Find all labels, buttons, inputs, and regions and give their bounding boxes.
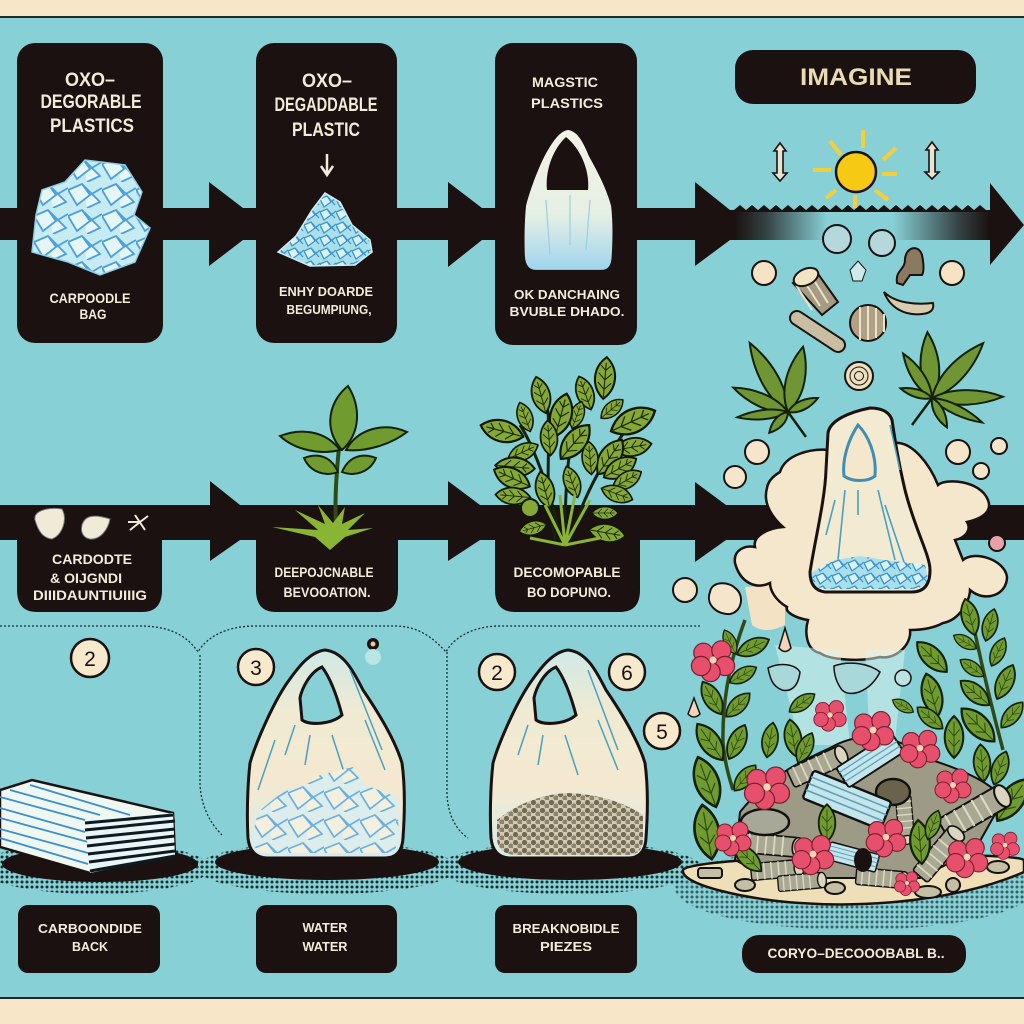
number badges (71, 639, 680, 749)
pile leaves (819, 804, 835, 842)
label: carboondide back (18, 905, 160, 973)
heading: OXO– (65, 70, 115, 91)
log (791, 264, 838, 315)
panel: oxo-degorable plastics (17, 43, 163, 343)
caption: OK DANCHAING (514, 288, 620, 302)
badge 5 (644, 713, 680, 749)
heading: PLASTIC (292, 120, 360, 141)
caption: BEGUMPIUNG, (286, 302, 372, 317)
panel: magstic plastics (495, 43, 637, 345)
small icon near bag (365, 638, 381, 665)
bubbles (673, 438, 1007, 614)
label: bottom pill: CORYO–DECOOOBABL B.. (768, 945, 944, 961)
arrow row 2 (0, 481, 1024, 562)
caption: CARPOODLE (50, 290, 130, 306)
title pill (735, 50, 976, 104)
heading: PLASTICS (531, 95, 603, 111)
debris mass (735, 737, 1003, 878)
ball (850, 305, 886, 341)
icon: stacked flat bags (0, 780, 175, 873)
badge 2 second (479, 654, 515, 690)
caption: BAG (80, 306, 107, 322)
badge 2 second: 2 (491, 662, 503, 685)
heading: DEGORABLE (40, 92, 142, 113)
caption: DIIIDAUNTIUIIIG (33, 588, 147, 603)
icon: bush (478, 356, 660, 545)
icon: seedling (272, 386, 407, 550)
spiral (845, 362, 873, 390)
icon: double arrows (773, 142, 939, 181)
crescent (884, 292, 933, 314)
badge 3: 3 (250, 657, 262, 680)
orbs (752, 225, 964, 285)
heading: MAGSTIC (532, 74, 598, 90)
label: breaknobidle pieces: PIEZES (540, 939, 592, 954)
heading (274, 71, 378, 141)
flowers (691, 641, 735, 682)
icon: granule pile (278, 193, 372, 266)
panel: cardodte caption (17, 508, 162, 612)
caption (279, 284, 373, 317)
stones (698, 861, 1009, 898)
cloud (735, 443, 1007, 660)
panel: decomopable caption: DECOMOPABLE (514, 565, 620, 580)
heading: DEGADDABLE (274, 95, 378, 116)
label: breaknobidle pieces (495, 905, 637, 973)
label: carboondide back: CARBOONDIDE (38, 921, 142, 936)
icons: fragments (35, 508, 148, 539)
label: water (256, 905, 397, 973)
badge 5: 5 (656, 721, 668, 744)
arrow: down (321, 154, 333, 175)
label: water: WATER (302, 939, 348, 954)
drips (688, 628, 911, 717)
halftone shadow (675, 846, 1024, 930)
badge 6 (609, 654, 645, 690)
rolls (786, 744, 851, 788)
heading: PLASTICS (50, 116, 134, 137)
icon: maple leaf left (731, 339, 820, 437)
panel: decomopable caption: BO DOPUNO. (527, 585, 611, 600)
caption: ENHY DOARDE (279, 284, 373, 299)
label: water: WATER (302, 920, 348, 935)
icon: plastic bag (525, 130, 612, 270)
panel: depojcnable caption: BEVOOATION. (284, 585, 370, 600)
stick (797, 318, 838, 345)
heading (40, 70, 142, 137)
dotted connector lines (0, 626, 700, 838)
panel: oxo-degadable plastic (256, 43, 397, 343)
horn (897, 248, 924, 285)
bottom cream border (0, 997, 1024, 1024)
decomposing pile (675, 597, 1024, 930)
icon: bag in cloud (810, 408, 930, 592)
title pill: IMAGINE (800, 64, 912, 91)
top cream border (0, 0, 1024, 18)
badge 2: 2 (84, 648, 96, 671)
caption: CARDODTE (52, 552, 132, 567)
heading (531, 74, 603, 111)
light rays (775, 645, 905, 745)
arrow row 1 (0, 182, 1024, 267)
caption (510, 288, 624, 319)
icon: bag with granules (490, 650, 647, 858)
right vine (911, 597, 1024, 827)
caption (33, 552, 147, 603)
label: bottom pill (742, 935, 966, 973)
icon: plastic pile (32, 160, 150, 275)
icon: sun (813, 130, 897, 208)
badge 3 (238, 649, 274, 685)
badge 6: 6 (621, 662, 633, 685)
label: carboondide back: BACK (72, 939, 109, 954)
caption: BVUBLE DHADO. (510, 305, 624, 319)
icon: bag with crumbled plastic (247, 650, 404, 858)
panel: depojcnable caption: DEEPOJCNABLE (274, 565, 374, 580)
falling debris (752, 225, 964, 390)
badge 2 (71, 639, 109, 677)
centre leaves behind pile (759, 689, 916, 766)
caption: & OIJGNDI (50, 571, 122, 586)
left vine (687, 620, 772, 861)
label: breaknobidle pieces: BREAKNOBIDLE (512, 921, 620, 936)
panel: decomopable caption (495, 530, 640, 612)
shadow bands under bags (0, 842, 702, 894)
icon: maple leaf right (898, 332, 1003, 429)
caption (50, 290, 130, 322)
heading: OXO– (302, 71, 352, 92)
panel: depojcnable caption (256, 530, 398, 612)
sandy base (683, 855, 1024, 904)
